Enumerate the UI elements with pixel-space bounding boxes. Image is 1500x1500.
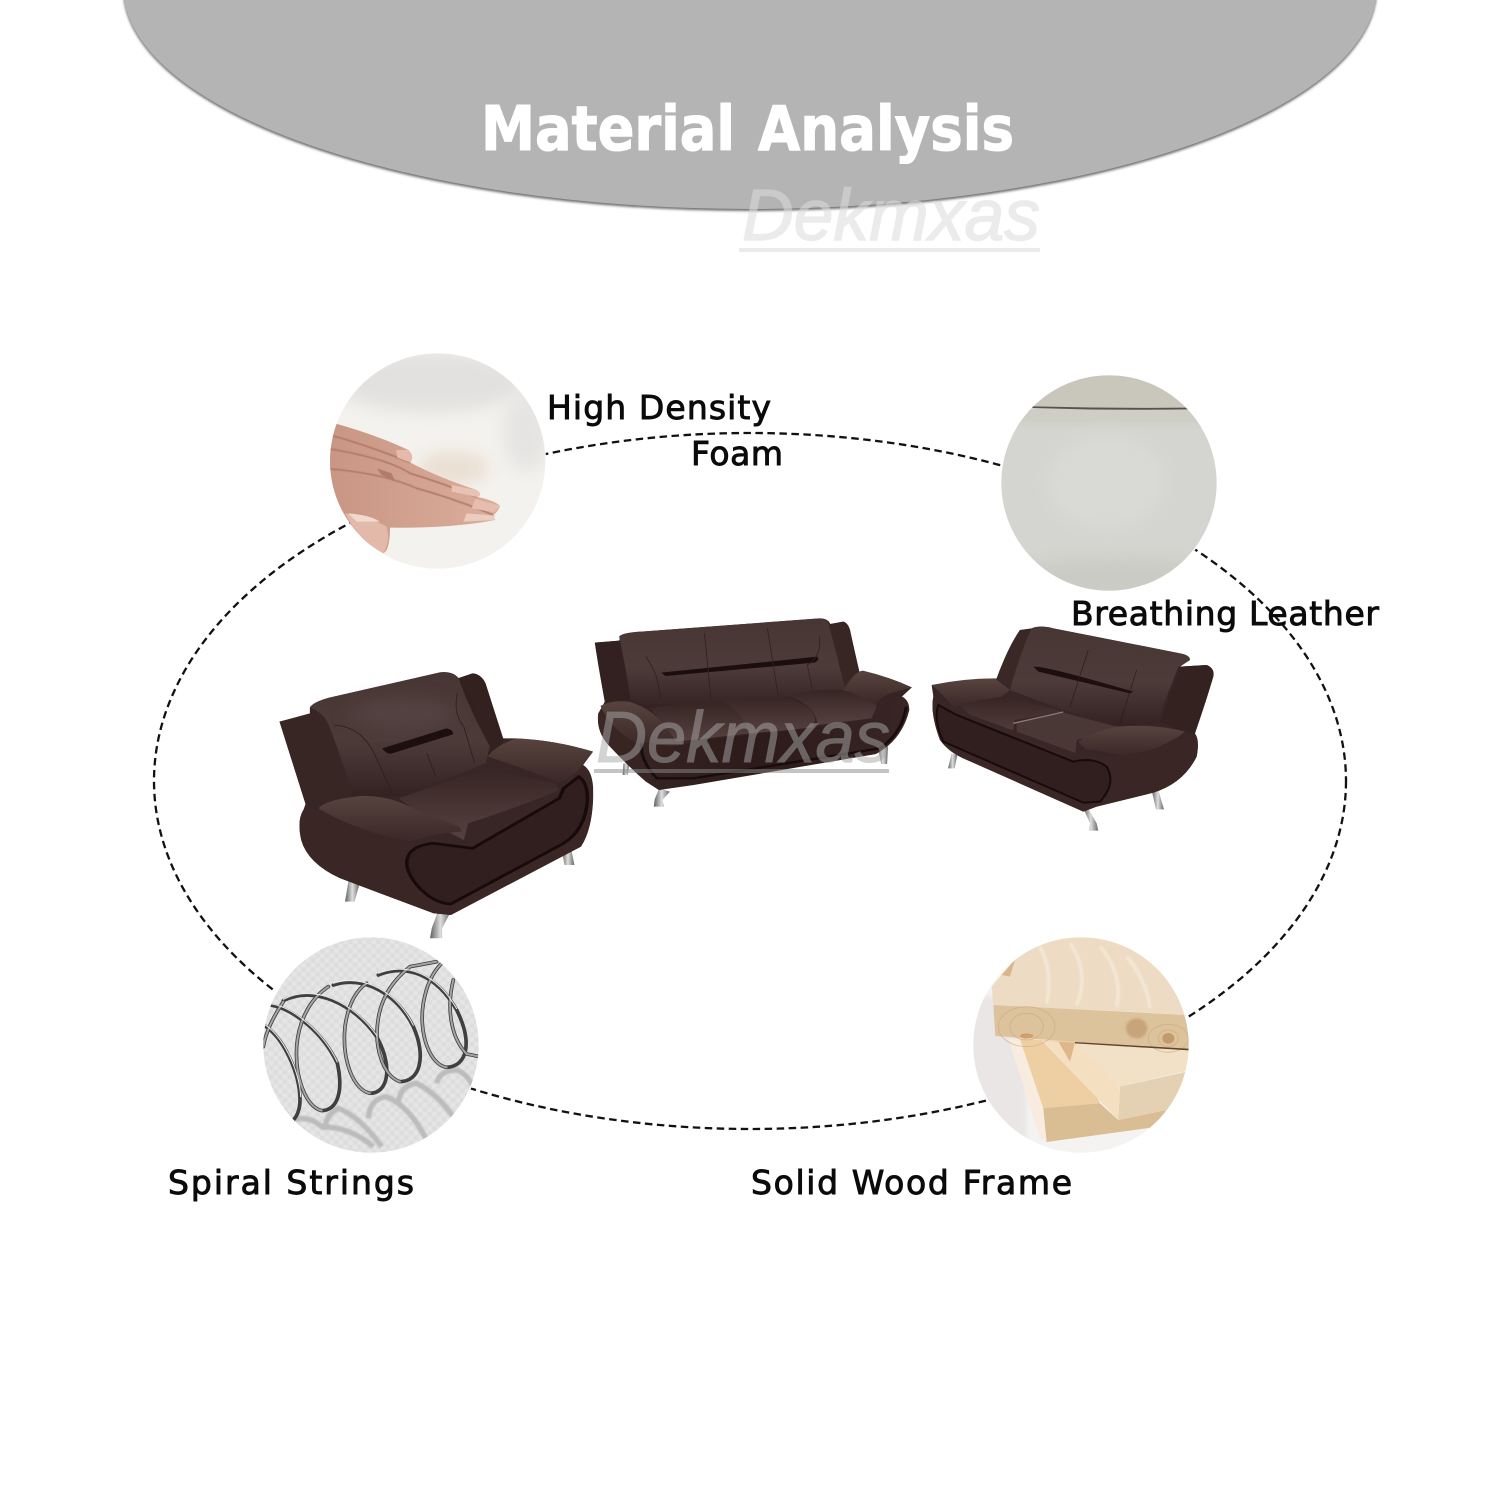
right wing <box>830 622 859 690</box>
sofa: loveseat <box>932 627 1214 831</box>
body <box>598 697 909 790</box>
spring shadows <box>293 1070 473 1147</box>
middle board <box>1075 1043 1193 1087</box>
right arm <box>1078 726 1185 757</box>
top board face <box>992 937 1184 1014</box>
lowest board <box>1017 1038 1100 1110</box>
right wing <box>1160 665 1214 733</box>
sofa: three seater <box>595 618 912 807</box>
seats <box>650 703 750 742</box>
body <box>299 765 593 915</box>
header: grey ellipse banner <box>123 0 1377 211</box>
seat <box>399 768 559 840</box>
back cushion <box>619 618 845 708</box>
legs <box>345 848 574 938</box>
material circle masks <box>262 353 1218 1154</box>
legs <box>623 747 888 807</box>
silhouette <box>595 618 912 790</box>
circle: breathing leather sample <box>1001 375 1217 591</box>
circle: spiral springs <box>263 938 479 1152</box>
dashed connector ellipse <box>154 433 1346 1129</box>
circle: solid wood boards <box>973 937 1189 1152</box>
left wing <box>595 641 635 702</box>
label: High Density Foam <box>547 388 783 473</box>
right arm <box>843 671 912 705</box>
left wing <box>997 628 1033 690</box>
left arm <box>932 678 1010 708</box>
left arm <box>319 796 462 842</box>
circle: high density foam with hand <box>330 354 546 568</box>
silhouette <box>280 672 593 915</box>
body <box>932 697 1198 812</box>
sofa: armchair <box>280 672 593 938</box>
watermark: centre Dekmxas: Dekmxas <box>596 698 890 778</box>
title <box>481 93 1014 165</box>
title: Analysis <box>758 93 1014 165</box>
watermark: top Dekmxas: Dekmxas <box>742 176 1040 256</box>
legs <box>948 753 1164 831</box>
label: High Density Foam: Foam <box>691 434 783 473</box>
right arm <box>488 738 593 783</box>
seats <box>958 697 1063 738</box>
infographic canvas <box>122 0 1380 1202</box>
top board front <box>993 1005 1193 1051</box>
back right wing <box>457 673 504 760</box>
label: Solid Wood Frame: Solid Wood Frame <box>751 1163 1072 1202</box>
front panel <box>407 777 587 904</box>
back side panel <box>280 713 353 804</box>
silhouette <box>932 627 1214 812</box>
spring coils <box>263 962 480 1120</box>
label: Breathing Leather: Breathing Leather <box>1071 594 1379 633</box>
left arm <box>600 701 694 747</box>
back cushion <box>310 672 490 797</box>
title: Material <box>481 93 735 165</box>
hand <box>330 423 500 553</box>
back cushion <box>1010 627 1190 727</box>
label: High Density Foam: High Density <box>547 388 771 427</box>
label: Spiral Strings: Spiral Strings <box>168 1163 414 1202</box>
